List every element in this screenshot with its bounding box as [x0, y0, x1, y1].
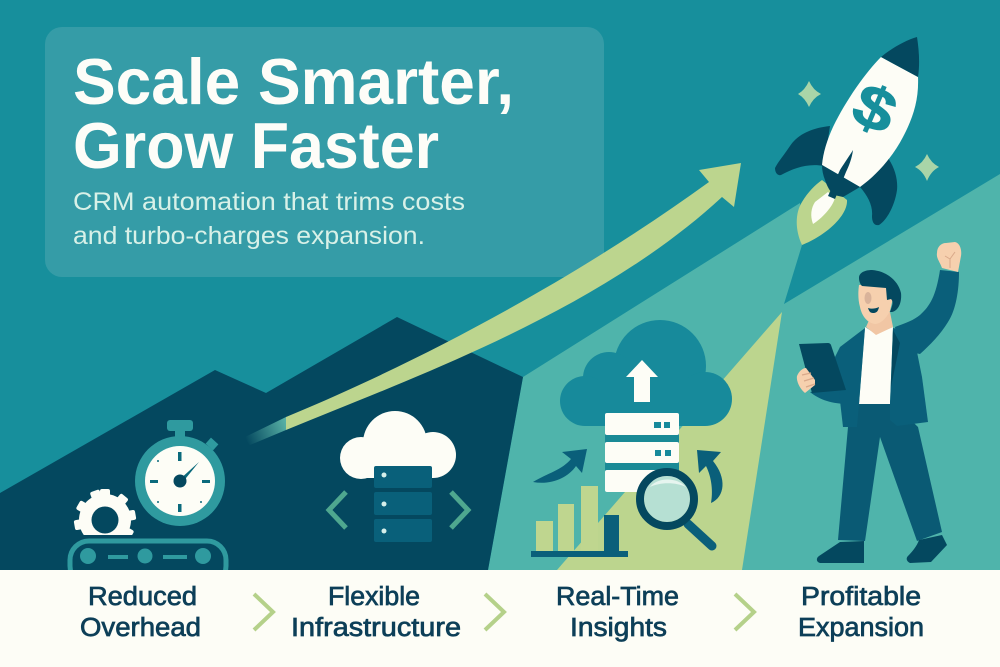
jacket right: [890, 328, 928, 426]
sparkle right: [915, 154, 939, 181]
fist: [937, 242, 961, 272]
subtitle: CRM automation that trims costs: [73, 188, 465, 216]
title: Grow Faster: [73, 109, 439, 182]
green light beam: [557, 312, 782, 570]
icon: rocket: [775, 37, 919, 245]
nose: [864, 292, 872, 304]
label: reduced overhead: [80, 583, 201, 642]
dark mountains: [0, 317, 523, 570]
title panel: [45, 27, 604, 277]
icon: conveyor belt: [70, 541, 226, 585]
bar chart: [531, 486, 628, 557]
lapel: [891, 330, 900, 387]
engine slit and nozzle: [828, 150, 853, 199]
shoes: [817, 535, 947, 563]
white shirt: [859, 327, 893, 404]
server units: [374, 466, 432, 542]
neck: [866, 312, 893, 335]
label: profitable expansion: Profitable: [801, 583, 921, 611]
mouth: [868, 307, 879, 313]
label: flexible infrastructure: Flexible: [328, 583, 420, 611]
flame: [797, 180, 847, 245]
label: profitable expansion: Expansion: [798, 614, 924, 642]
trousers: [838, 400, 942, 541]
white cloud: [340, 411, 456, 479]
engine base: [822, 165, 860, 197]
label: reduced overhead: Overhead: [80, 614, 201, 642]
subtitle: [73, 188, 465, 250]
label: real-time insights: [556, 583, 679, 642]
icon: teal cloud with upload arrow: [560, 320, 732, 426]
curved arrow left: [533, 449, 587, 483]
chevron 3: [735, 594, 754, 630]
label: real-time insights: Insights: [570, 614, 667, 642]
chevron 2: [485, 594, 504, 630]
forearm holding tablet: [810, 388, 850, 404]
left fin: [775, 126, 830, 175]
hand: [797, 368, 815, 393]
label: reduced overhead: Reduced: [88, 583, 197, 611]
person celebrating: [797, 242, 961, 563]
raised arm: [895, 270, 959, 354]
rocket body: [822, 57, 918, 187]
label: flexible infrastructure: [291, 583, 461, 642]
icon: cloud with server stack: [329, 411, 468, 542]
tablet: [799, 343, 846, 393]
dollar sign: $: [843, 70, 907, 148]
nose cone: [881, 37, 919, 77]
hair: [859, 270, 901, 312]
icon: stopwatch: [135, 420, 225, 526]
face: [858, 283, 893, 324]
upload arrow: [626, 360, 658, 402]
sparkle left: [798, 81, 821, 107]
icon: magnifying glass: [640, 472, 712, 546]
label: profitable expansion: [798, 583, 924, 642]
jacket left: [835, 328, 865, 427]
subtitle: and turbo-charges expansion.: [73, 222, 425, 250]
light teal ground plane: [488, 174, 1000, 570]
curved arrow right: [697, 450, 723, 503]
label: flexible infrastructure: Infrastructure: [291, 614, 461, 642]
title: Scale Smarter,: [73, 45, 514, 118]
right fin: [860, 158, 897, 225]
growth arrow: [243, 163, 741, 445]
chevron 1: [254, 594, 273, 630]
scaling chevrons: [329, 492, 468, 528]
bottom band: [0, 570, 1000, 667]
title: [73, 45, 514, 182]
icon: insights server: [605, 413, 679, 492]
icon: gear: [74, 489, 136, 535]
label: real-time insights: Real-Time: [556, 583, 679, 611]
